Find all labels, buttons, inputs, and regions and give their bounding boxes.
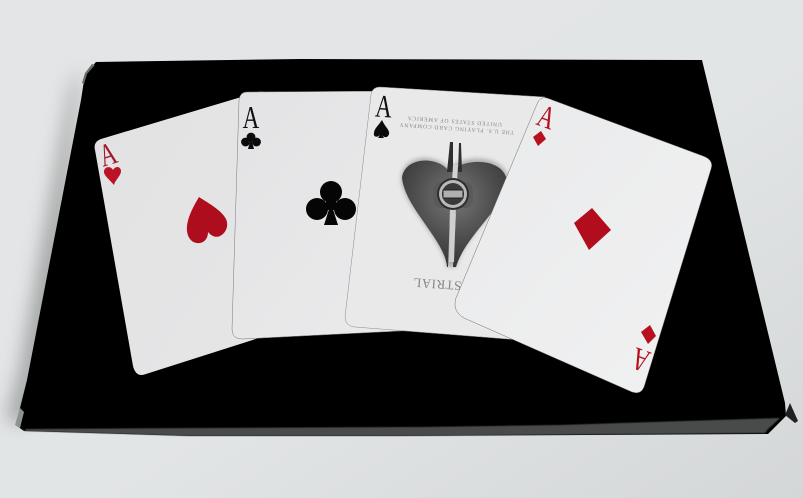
fine print: UNITED STATES OF AMERICA [407, 114, 502, 127]
box right tab [785, 403, 798, 423]
corner index A: A [532, 98, 560, 137]
centre diamond [574, 208, 611, 250]
hub [433, 178, 473, 210]
card: ace of spades [345, 87, 545, 340]
corner index A: A [243, 100, 259, 136]
card face [455, 98, 712, 393]
bottom index A: A [627, 340, 655, 379]
corner spade [374, 120, 389, 138]
corner club [241, 133, 261, 149]
heart logo [401, 142, 509, 267]
fine print [399, 114, 514, 135]
card face [232, 91, 420, 339]
centre heart [187, 197, 227, 243]
card: ace of clubs [232, 91, 420, 339]
box shadow [6, 66, 80, 424]
upper prongs [447, 142, 462, 172]
logo shadow [401, 158, 509, 267]
corner index A: A [95, 136, 121, 175]
card face [95, 92, 268, 375]
card: ace of diamonds [455, 98, 712, 393]
metal heart [402, 161, 507, 267]
centre slot [449, 205, 456, 262]
inverted wordmark: INDUSTRIAL [412, 275, 496, 296]
card: ace of hearts [95, 92, 268, 375]
fine print: THE U.S. PLAYING CARD COMPANY [399, 121, 514, 135]
corner diamond [533, 131, 546, 146]
centre club [306, 181, 356, 225]
corner index A: A [374, 89, 393, 126]
box lid [17, 59, 786, 436]
card face [345, 87, 545, 340]
box corner highlight [82, 64, 95, 84]
bottom diamond [641, 325, 656, 344]
box left tab [15, 408, 24, 428]
box bottom edge [24, 418, 780, 436]
black box [15, 59, 798, 436]
corner heart [104, 167, 121, 185]
